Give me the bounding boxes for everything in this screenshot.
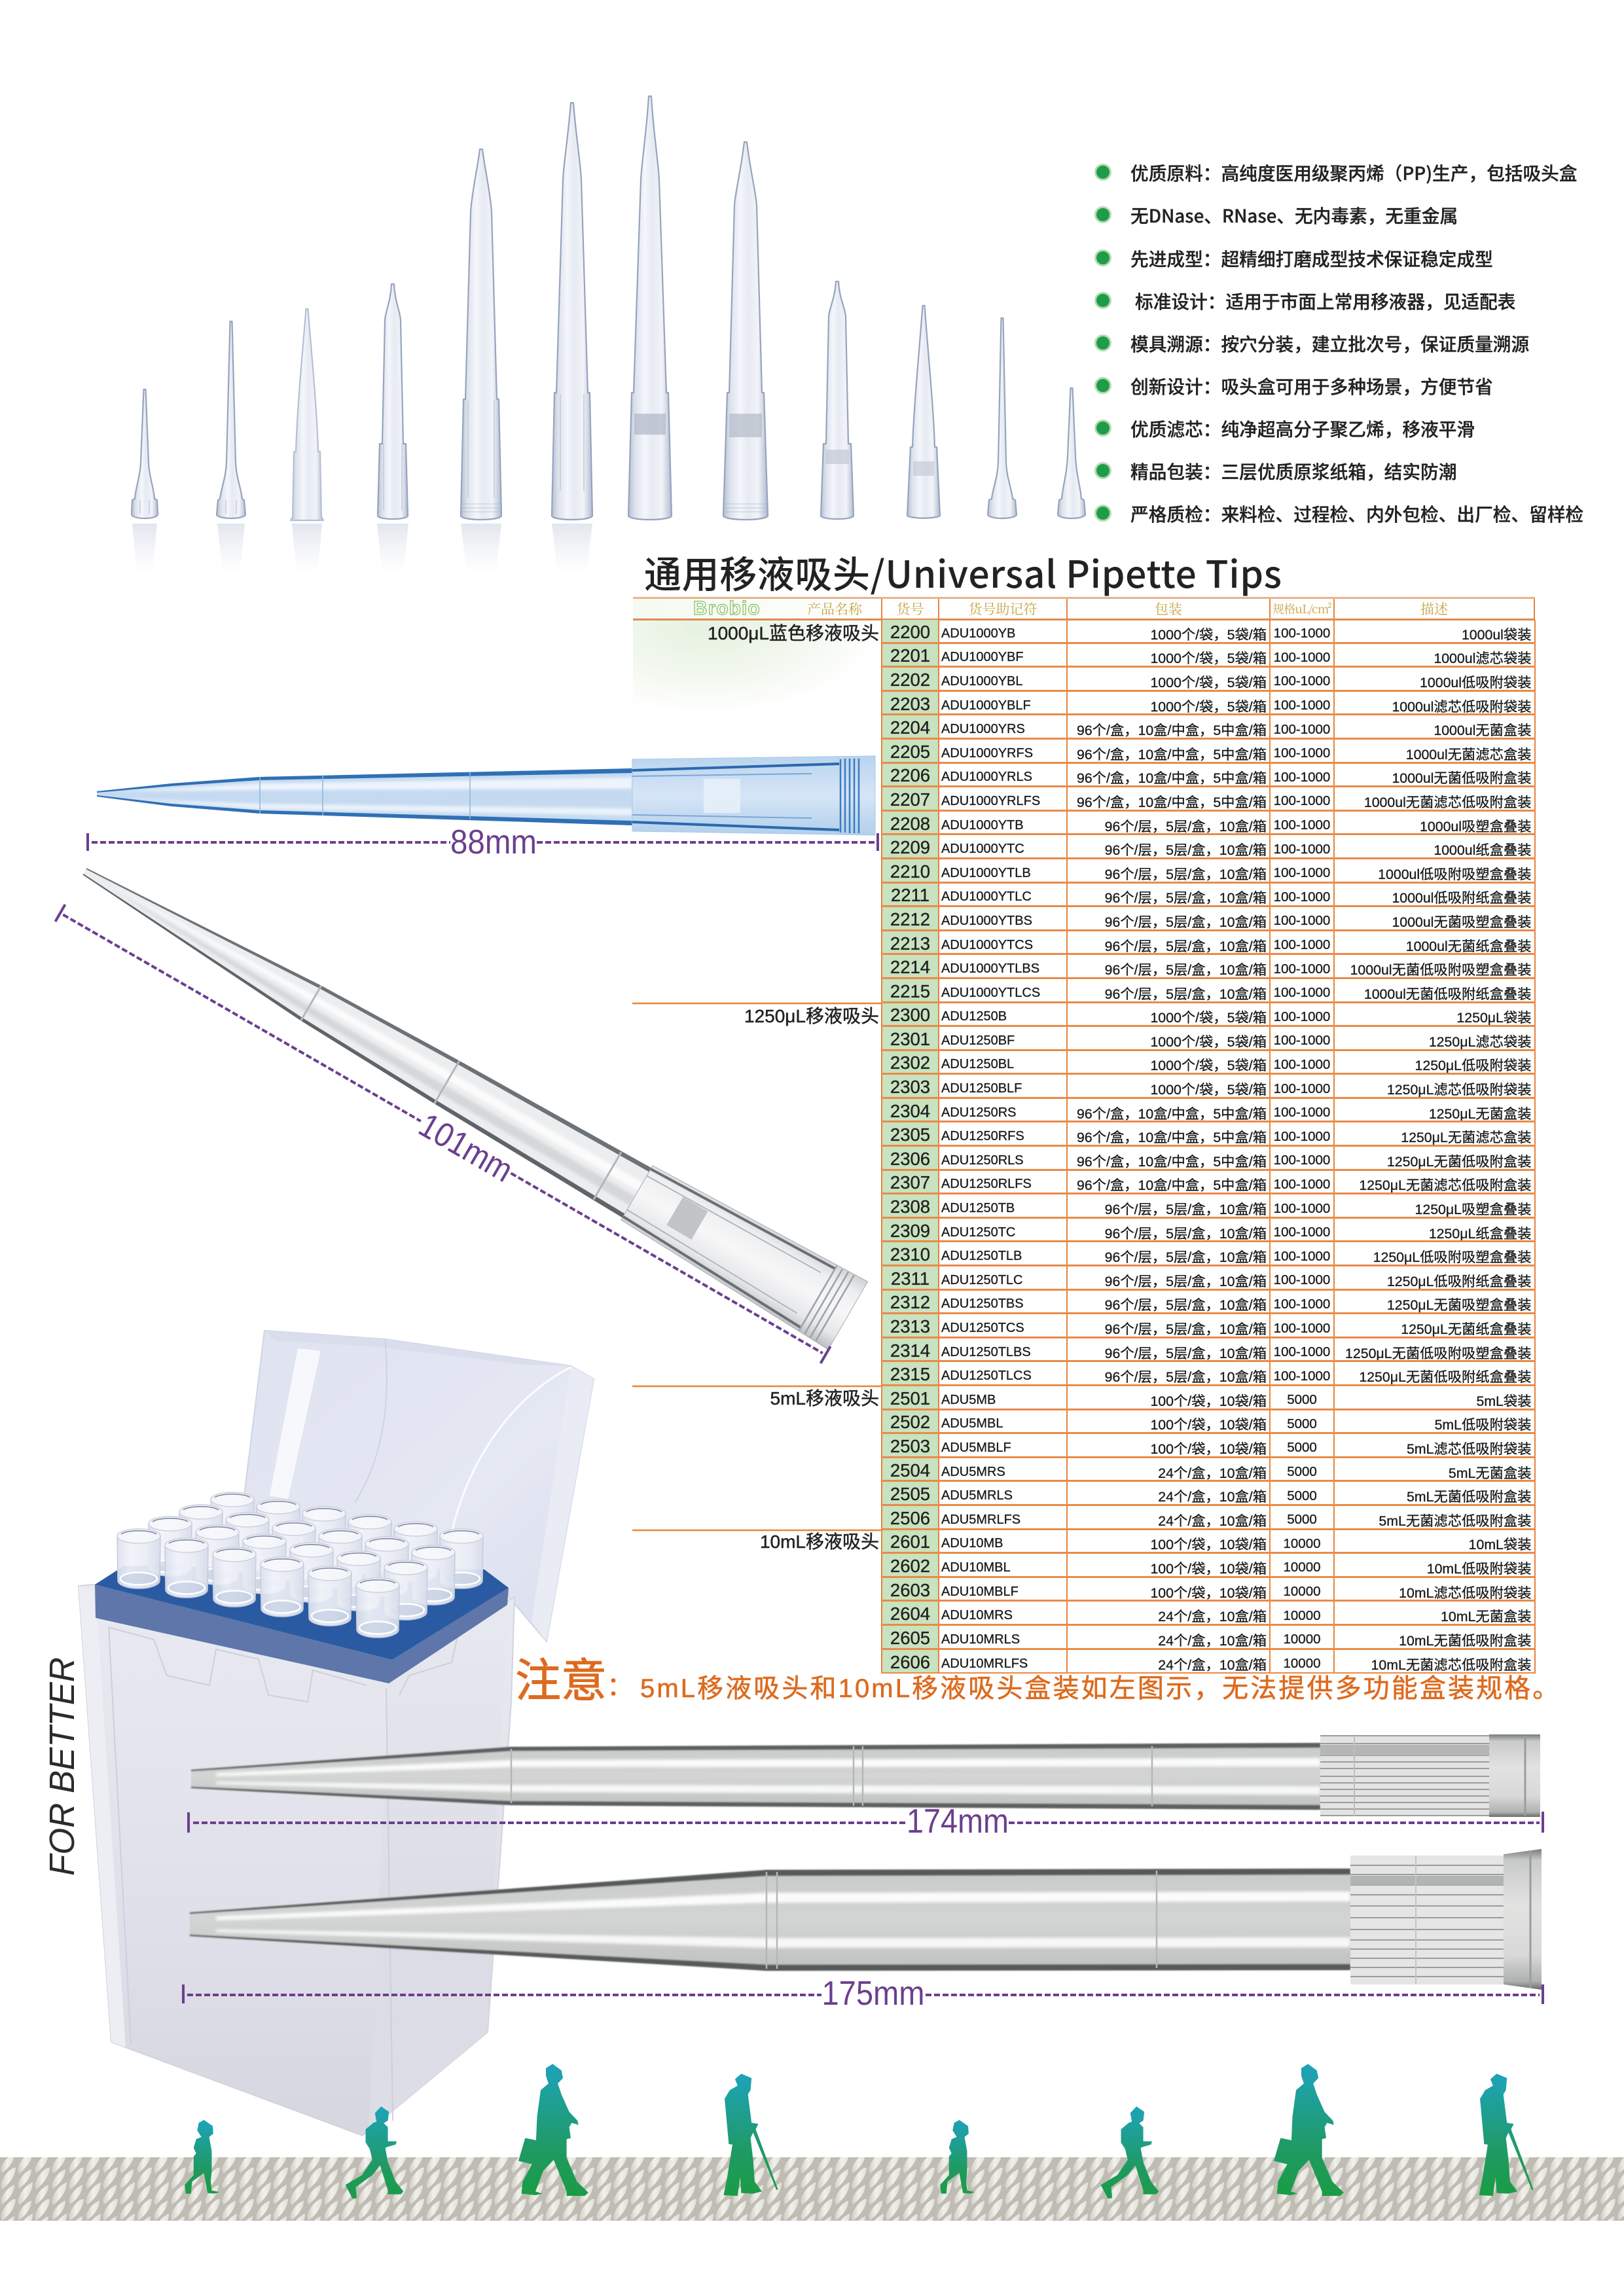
section divider lines <box>632 1003 881 1530</box>
blue tray side <box>95 1585 509 1683</box>
rows: 1000uL blue: ADU1000YBF <box>941 650 1024 664</box>
rows: 5mL <box>881 1386 1536 1530</box>
rows: 1000uL blue: 2202 <box>890 670 930 690</box>
rows: 1250uL: ADU1250TLB <box>941 1249 1022 1263</box>
header: code: 货号 <box>897 599 924 619</box>
rows: 1250uL: ADU1250TC <box>941 1225 1015 1240</box>
product label: 1250uL tips: 1250μL移液吸头 <box>744 1006 879 1026</box>
rows: 1250uL: ADU1250RFS <box>941 1129 1024 1143</box>
rows: 1250uL: 100-1000 <box>1274 1129 1330 1144</box>
rows: 1250uL: ADU1250TBS <box>941 1297 1024 1311</box>
feature 2 <box>1094 202 1458 228</box>
rows: 1250uL: 100-1000 <box>1274 1057 1330 1072</box>
rows: 1000uL blue: 2215 <box>890 981 930 1001</box>
rows: 1000uL blue: 100-1000 <box>1274 865 1330 880</box>
dimension: 101mm <box>50 897 835 1372</box>
product label: 5mL tips: 5mL移液吸头 <box>770 1388 879 1408</box>
rows: 5mL: ADU5MRLFS <box>941 1513 1020 1527</box>
rows: 1250uL: ADU1250BLF <box>941 1081 1022 1096</box>
blue tray top <box>95 1566 509 1660</box>
rows: 1250uL: 2315 <box>890 1364 930 1384</box>
tip 4 <box>377 284 408 575</box>
rows: 5mL: 2504 <box>890 1460 930 1480</box>
rows: 1250uL: 2305 <box>890 1124 930 1145</box>
rows: 1000uL blue: 100-1000 <box>1274 913 1330 928</box>
rows: 1000uL blue: 100-1000 <box>1274 698 1330 713</box>
rows: 5mL: 5000 <box>1287 1416 1317 1431</box>
notice colon: ： <box>607 1665 633 1703</box>
rows: 1000uL blue: 100-1000 <box>1274 673 1330 689</box>
feature bullet list: 模具溯源：按穴分装，建立批次号，保证质量溯源 <box>1130 330 1529 356</box>
tip 1 <box>132 389 158 575</box>
rows: 1000uL blue: ADU1000YBL <box>941 674 1023 689</box>
rows: 1250uL: 100-1000 <box>1274 1272 1330 1287</box>
rows: 10mL: ADU10MRS <box>941 1608 1013 1623</box>
notice heading: 注意 <box>515 1644 607 1710</box>
rows: 1250uL: ADU1250BF <box>941 1033 1015 1048</box>
dimension: 88mm <box>88 823 878 861</box>
feature bullet list: 标准设计：适用于市面上常用移液器，见适配表 <box>1135 287 1515 314</box>
rows: 5mL: ADU5MBL <box>941 1416 1003 1431</box>
feature 8 <box>1094 457 1456 484</box>
header: spec: 规格uL/cm² <box>1272 600 1331 617</box>
rows: 1250uL: 100-1000 <box>1274 1321 1330 1336</box>
rows: 1000uL blue: ADU1000YRS <box>941 722 1025 736</box>
rows: 1000uL blue: 2212 <box>890 909 930 929</box>
rows: 5mL: 5000 <box>1287 1464 1317 1479</box>
rows: 1000uL blue: ADU1000YTLC <box>941 889 1032 904</box>
rows: 10mL: ADU10MBL <box>941 1560 1011 1575</box>
feature 9 <box>1094 500 1583 526</box>
feature bullet list: 先进成型：超精细打磨成型技术保证稳定成型 <box>1130 245 1493 271</box>
rows: 1000uL blue: 100-1000 <box>1274 842 1330 857</box>
rows: 1250uL: 2312 <box>890 1292 930 1312</box>
rows: 1000uL blue: ADU1000YRLFS <box>941 794 1040 808</box>
rows: 1250uL: ADU1250RLFS <box>941 1177 1032 1191</box>
top row of pipette tips <box>132 96 1085 575</box>
rows: 1250uL: 2311 <box>891 1268 929 1289</box>
rows: 10mL: ADU10MBLF <box>941 1585 1019 1599</box>
rows: 10mL: 10000 <box>1283 1632 1321 1647</box>
rows: 1000uL blue: ADU1000YTBS <box>941 914 1032 928</box>
tip 2 <box>217 321 245 575</box>
feature bullet list: 无DNase、RNase、无内毒素，无重金属 <box>1130 202 1458 228</box>
rows: 5mL: 2506 <box>890 1508 930 1528</box>
clear 1250uL tip (diagonal) <box>65 838 868 1350</box>
rows: 1250uL: 2307 <box>890 1172 930 1193</box>
rows: 10mL <box>881 1530 1536 1674</box>
notice <box>515 1644 1561 1710</box>
main title: 通用移液吸头/Universal Pipette Tips <box>644 545 1282 599</box>
rows: 10mL: 2603 <box>890 1580 930 1600</box>
rows: 1000uL blue: 2205 <box>890 742 930 762</box>
rows: 1000uL blue: ADU1000YTLCS <box>941 986 1040 1000</box>
rows: 1000uL blue: ADU1000YTLBS <box>941 961 1039 976</box>
rows: 5mL: 2503 <box>890 1436 930 1456</box>
rows: 1000uL blue: 100-1000 <box>1274 961 1330 977</box>
rows: 1000uL blue: 100-1000 <box>1274 745 1330 761</box>
tip 8 with filter <box>723 142 768 520</box>
feature bullet list: 创新设计：吸头盒可用于多种场景，方便节省 <box>1130 372 1493 399</box>
rows: 1250uL: 2313 <box>890 1316 930 1336</box>
rows: 1250uL: 2309 <box>890 1221 930 1240</box>
rows: 10mL: ADU10MB <box>941 1536 1003 1551</box>
braided ground strip <box>0 2157 1624 2221</box>
rows: 5mL: 5000 <box>1287 1488 1317 1503</box>
rows: 1000uL blue: 100-1000 <box>1274 722 1330 737</box>
rows: 1000uL blue: 2213 <box>890 933 930 953</box>
rows: 5mL: ADU5MB <box>941 1393 996 1407</box>
rows: 1000uL blue: ADU1000YB <box>941 626 1015 641</box>
rows: 1250uL: 100-1000 <box>1274 1225 1330 1240</box>
rows: 10mL: 2606 <box>890 1652 930 1672</box>
rows: 1250uL: ADU1250B <box>941 1009 1007 1024</box>
rows: 1250uL: 100-1000 <box>1274 1009 1330 1024</box>
rows: 1250uL: 100-1000 <box>1274 1153 1330 1168</box>
rows: 1250uL: 2304 <box>890 1101 930 1121</box>
tip 11 <box>988 318 1017 518</box>
header: product name: 产品名称 <box>807 599 862 619</box>
rows: 5mL: 2501 <box>890 1388 930 1408</box>
rows: 10mL: 24个/盒，10盒/箱 <box>1158 1657 1267 1672</box>
rows: 1000uL blue: ADU1000YTC <box>941 842 1024 856</box>
tip 3 <box>291 309 323 575</box>
rows: 10mL: ADU10MRLFS <box>941 1657 1028 1671</box>
rows: 1000uL blue: 2211 <box>891 885 929 905</box>
rows: 1000uL blue: 100-1000 <box>1274 626 1330 641</box>
feature bullet list: 优质滤芯：纯净超高分子聚乙烯，移液平滑 <box>1130 415 1475 441</box>
brand logo: Brobio <box>693 598 761 619</box>
rows: 10mL: 10000 <box>1283 1608 1321 1623</box>
rows: 1000uL blue: 2214 <box>890 957 930 977</box>
rows: 10mL: 10mL无菌滤芯低吸附盒装 <box>1371 1657 1532 1672</box>
rows: 5mL: 5000 <box>1287 1392 1317 1407</box>
tip 9 with filter <box>821 281 854 519</box>
rows: 1000uL blue: 2208 <box>890 814 930 833</box>
rows: 1000uL blue: 100-1000 <box>1274 889 1330 905</box>
feature 3 <box>1094 245 1493 271</box>
rows: 10mL: 2601 <box>890 1532 930 1552</box>
rows: 5mL: 2502 <box>890 1412 930 1432</box>
rows: 1250uL: 2306 <box>890 1149 930 1169</box>
notice text: 5mL移液吸头和10mL移液吸头盒装如左图示，无法提供多功能盒装规格。 <box>640 1674 1561 1703</box>
dimension: 175mm <box>183 1975 1543 2013</box>
rows: 1250uL: 100-1000 <box>1274 1369 1330 1384</box>
header: code <box>881 599 938 619</box>
header: description: 描述 <box>1420 599 1448 619</box>
rows: 1000uL blue: 100-1000 <box>1274 650 1330 665</box>
tip 6 <box>552 103 592 575</box>
rows: 10mL: 2604 <box>890 1604 930 1624</box>
rows: 1250uL: 100-1000 <box>1274 1105 1330 1120</box>
rows: 1250uL: ADU1250TLCS <box>941 1369 1032 1383</box>
tip 10 with filter <box>907 306 940 518</box>
feature bullet list: 精品包装：三层优质原浆纸箱，结实防潮 <box>1130 457 1456 484</box>
product label: 10mL tips: 10mL移液吸头 <box>760 1532 879 1552</box>
rows: 5mL: ADU5MBLF <box>941 1441 1011 1455</box>
header: packaging <box>1066 599 1269 619</box>
10mL tip, 175mm <box>190 1849 1542 1990</box>
rows: 5mL: 5000 <box>1287 1440 1317 1455</box>
rows: 1000uL blue: ADU1000YBLF <box>941 698 1031 713</box>
rows: 1000uL blue: 100-1000 <box>1274 817 1330 833</box>
rows: 10mL: ADU10MRLS <box>941 1632 1020 1647</box>
feature 1 <box>1094 159 1578 185</box>
rows: 1250uL: 100-1000 <box>1274 1297 1330 1312</box>
tip box with open lid <box>79 1331 594 2136</box>
rows: 1250uL: ADU1250RLS <box>941 1153 1024 1168</box>
walking people, left group <box>185 2064 778 2198</box>
rows: 1250uL: ADU1250TLBS <box>941 1345 1031 1359</box>
rows: 1000uL blue: 2207 <box>890 789 930 810</box>
rows: 1250uL: ADU1250BL <box>941 1057 1014 1071</box>
feature bullet list <box>1094 159 1583 526</box>
rows: 1250uL: 2308 <box>890 1196 930 1217</box>
dimension: 101mm: 101mm <box>412 1106 519 1190</box>
dimension: 174mm <box>189 1803 1543 1840</box>
rows: 10mL: 10000 <box>1283 1560 1321 1575</box>
walking people, right group <box>940 2064 1534 2198</box>
table header <box>633 597 1535 620</box>
feature bullet list: 严格质检：来料检、过程检、内外包检、出厂检、留样检 <box>1130 500 1583 526</box>
box body <box>79 1585 514 2136</box>
rows: 1250uL: ADU1250RS <box>941 1105 1017 1120</box>
header: mnemonic: 货号助记符 <box>969 599 1037 619</box>
rows: 1000uL blue: 2203 <box>890 694 930 713</box>
rows: 1250uL: 2302 <box>890 1052 930 1073</box>
rows: 1000uL blue <box>881 620 1536 1003</box>
green glow behind product-name column <box>633 620 880 745</box>
rows: 1250uL: 100-1000 <box>1274 1201 1330 1216</box>
rows: 1000uL blue: 100-1000 <box>1274 793 1330 808</box>
rows: 1000uL blue: ADU1000YTLB <box>941 866 1031 880</box>
rows: 1000uL blue: ADU1000YRLS <box>941 770 1032 784</box>
rows: 10mL: 10000 <box>1283 1656 1321 1671</box>
rows: 10mL: 10000 <box>1283 1536 1321 1551</box>
rows: 1000uL blue: ADU1000YTCS <box>941 938 1033 952</box>
rows: 1000uL blue: 100-1000 <box>1274 985 1330 1000</box>
rows: 5mL: ADU5MRLS <box>941 1488 1013 1503</box>
product label: 1000uL blue tips: 1000μL蓝色移液吸头 <box>708 623 879 643</box>
rows: 1000uL blue: 2206 <box>890 765 930 785</box>
tip 7 with filter <box>628 96 672 520</box>
rows: 1250uL: 2303 <box>890 1077 930 1097</box>
rows: 10mL: 2602 <box>890 1556 930 1576</box>
tip 12 <box>1058 388 1085 518</box>
rows: 1250uL: 2300 <box>890 1005 930 1025</box>
rows: 1250uL: 100-1000 <box>1274 1177 1330 1192</box>
rows: 1250uL: 2301 <box>890 1029 930 1049</box>
rows: 5mL: 5000 <box>1287 1512 1317 1527</box>
feature 5 <box>1094 330 1529 356</box>
blue 1000uL tip <box>97 756 875 835</box>
feature 7 <box>1094 415 1475 441</box>
rows: 1250uL: ADU1250TB <box>941 1201 1015 1215</box>
feature 4 <box>1094 287 1515 314</box>
header: description <box>1333 599 1535 619</box>
24 tips in rack <box>117 1492 483 1638</box>
header: mnemonic <box>938 599 1066 619</box>
rows: 1000uL blue: 2210 <box>890 861 930 882</box>
dimension: 175mm: 175mm <box>822 1975 924 2013</box>
feature bullet list: 优质原料：高纯度医用级聚丙烯（PP)生产，包括吸头盒 <box>1130 159 1578 185</box>
dimension: 174mm: 174mm <box>907 1803 1009 1840</box>
rows: 1000uL blue: 2200 <box>890 622 930 642</box>
dimension: 88mm: 88mm <box>450 823 537 861</box>
rows: 1250uL: 100-1000 <box>1274 1344 1330 1359</box>
rows: 1000uL blue: ADU1000YTB <box>941 818 1024 833</box>
rows: 1250uL: ADU1250TLC <box>941 1273 1023 1287</box>
rows: 1250uL: ADU1250TCS <box>941 1321 1024 1335</box>
rows: 5mL: ADU5MRS <box>941 1465 1005 1479</box>
5mL tip, 174mm <box>191 1734 1540 1817</box>
rows: 1250uL <box>881 1003 1536 1386</box>
product table <box>881 620 1536 1674</box>
FOR BETTER vertical text: FOR BETTER <box>43 1657 82 1876</box>
rows: 1000uL blue: ADU1000YRFS <box>941 746 1033 761</box>
rows: 1250uL: 100-1000 <box>1274 1249 1330 1264</box>
rows: 1250uL: 100-1000 <box>1274 1033 1330 1048</box>
rows: 1250uL: 2314 <box>890 1340 930 1360</box>
rows: 1000uL blue: 100-1000 <box>1274 937 1330 952</box>
feature 6 <box>1094 372 1493 399</box>
rows: 10mL: 10000 <box>1283 1584 1321 1599</box>
header: packaging: 包装 <box>1155 599 1182 619</box>
rows: 5mL: 2505 <box>890 1484 930 1504</box>
rows: 1000uL blue: 2201 <box>890 645 930 666</box>
rows: 1250uL: 100-1000 <box>1274 1081 1330 1096</box>
rows: 1000uL blue: 100-1000 <box>1274 770 1330 785</box>
tip 5 <box>461 149 501 575</box>
rows: 10mL: 2605 <box>890 1628 930 1648</box>
box lid <box>242 1331 594 1641</box>
rows: 1000uL blue: 2209 <box>890 837 930 857</box>
rows: 1250uL: 2310 <box>890 1244 930 1265</box>
rows: 1000uL blue: 2204 <box>890 717 930 738</box>
